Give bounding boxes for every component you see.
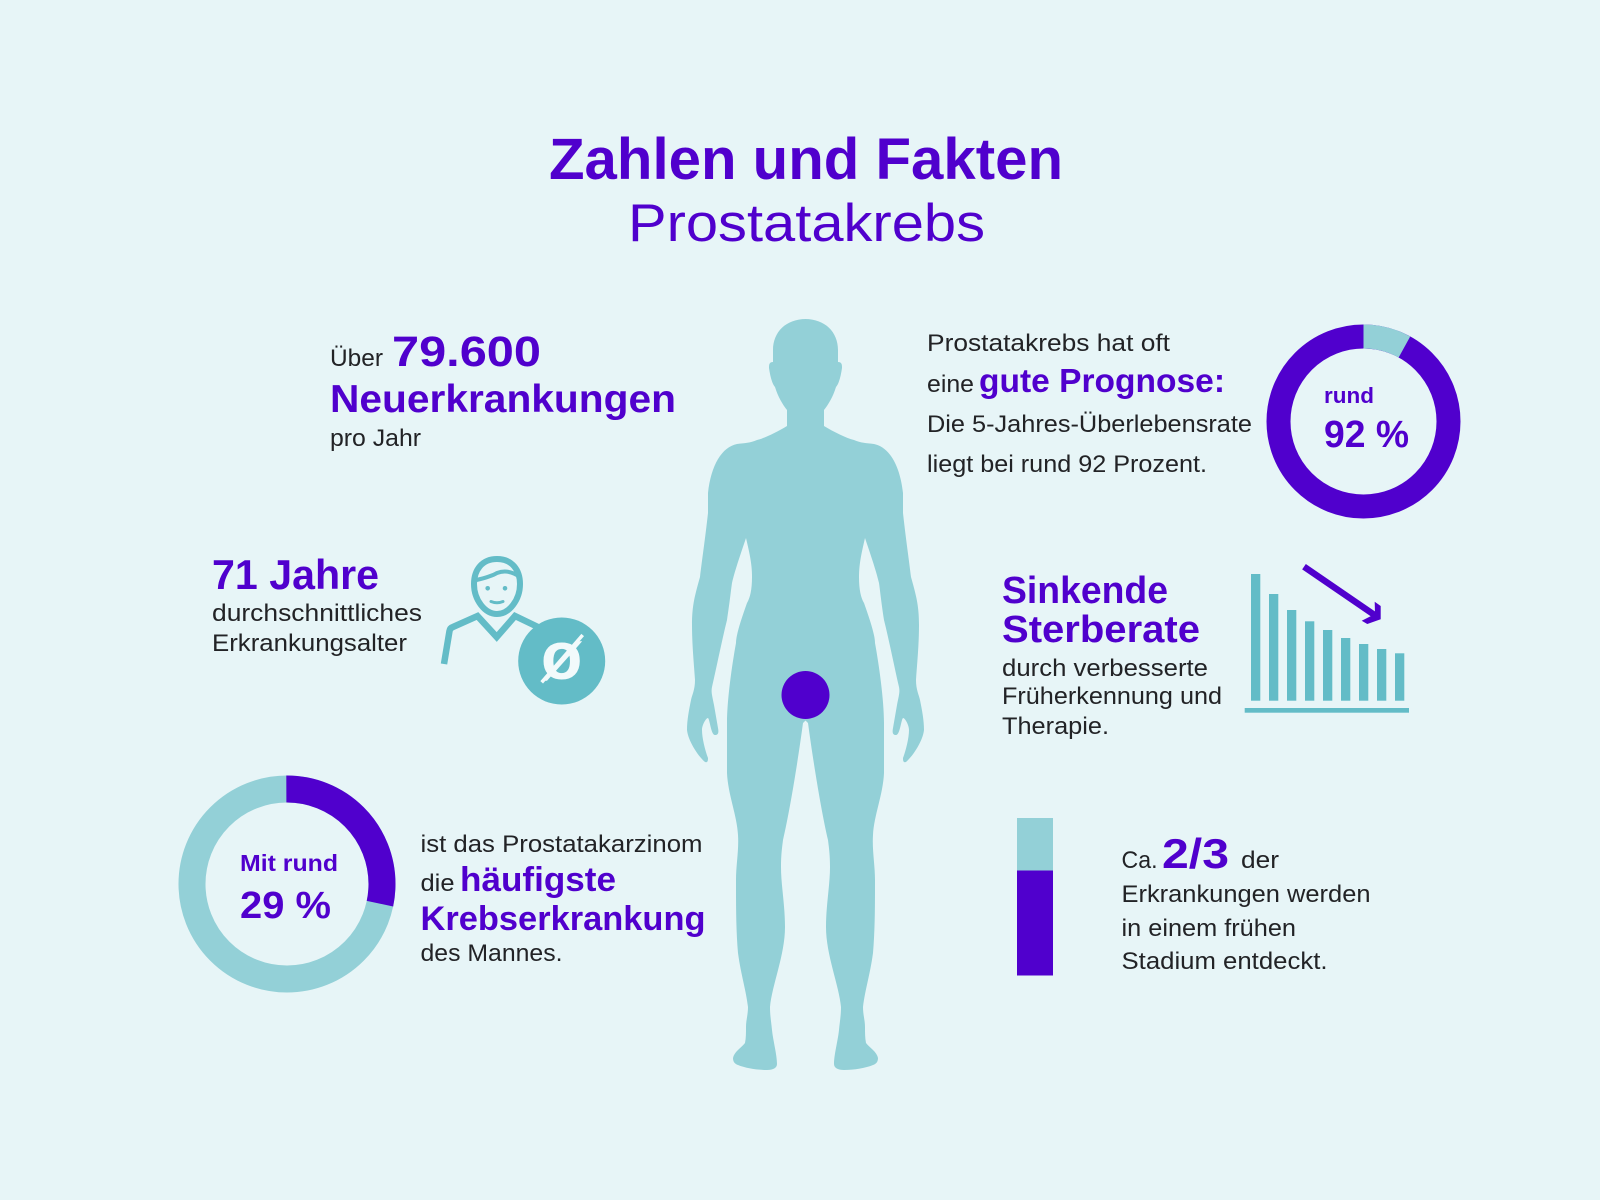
donut chart: 29 percent: 29 % (240, 885, 331, 927)
text block: falling mortality (1002, 570, 1222, 740)
text block: early detection (1122, 830, 1370, 975)
body silhouette (687, 319, 924, 1070)
subtitle: Prostatakrebs (628, 194, 985, 253)
text block: early detection: Stadium entdeckt. (1122, 948, 1328, 975)
text block: early detection: 2/3 (1162, 830, 1229, 877)
right half of body (805, 319, 924, 1070)
text block: average age: durchschnittliches (212, 600, 422, 627)
text block: good prognosis: Die 5-Jahres-Überlebensrate (927, 411, 1252, 438)
text block: early detection: der (1241, 847, 1279, 874)
text block: new cases: Über (330, 345, 383, 372)
text block: average age: 71 Jahre (212, 551, 379, 598)
text block: good prognosis (927, 330, 1252, 478)
man outline (444, 559, 540, 664)
text block: average age: Erkrankungsalter (212, 630, 407, 657)
text block: most common cancer: häufigste (460, 861, 616, 899)
text block: good prognosis: Prostatakrebs hat oft (927, 330, 1170, 357)
text block: early detection: in einem frühen (1122, 915, 1296, 942)
progress bar: two thirds (1017, 818, 1053, 976)
donut chart: 92 percent: rund (1324, 383, 1374, 408)
donut chart: 29 percent (192, 789, 382, 979)
prostate marker (782, 671, 830, 719)
text block: good prognosis: eine (927, 371, 974, 398)
text block: new cases (330, 328, 676, 452)
left half of body (687, 319, 806, 1070)
bar chart: falling mortality (1245, 567, 1409, 713)
text block: falling mortality: Sinkende (1002, 570, 1168, 612)
average badge (518, 618, 605, 704)
arrow (1304, 567, 1381, 624)
text block: most common cancer: des Mannes. (420, 940, 562, 967)
donut chart: 29 percent: Mit rund (240, 850, 338, 876)
donut chart: 92 percent: 92 % (1324, 414, 1409, 456)
text block: good prognosis: liegt bei rund 92 Prozent. (927, 451, 1207, 478)
icon: man with average symbol: ø (541, 618, 583, 694)
text block: good prognosis: gute Prognose: (979, 362, 1225, 399)
text block: new cases: Neuerkrankungen (330, 378, 676, 421)
text block: falling mortality: Früherkennung und (1002, 683, 1222, 710)
text block: most common cancer: Krebserkrankung (420, 900, 706, 938)
text block: falling mortality: durch verbesserte (1002, 655, 1208, 682)
title: Zahlen und Fakten (549, 127, 1063, 192)
donut chart: 92 percent (1278, 336, 1448, 506)
text block: falling mortality: Sterberate (1002, 609, 1200, 651)
text block: falling mortality: Therapie. (1002, 713, 1109, 740)
text block: average age (212, 551, 422, 657)
text block: most common cancer: die (420, 870, 454, 897)
title block (549, 127, 1063, 253)
text block: new cases: 79.600 (392, 328, 541, 376)
text block: early detection: Ca. (1122, 847, 1158, 874)
text block: new cases: pro Jahr (330, 425, 421, 452)
text block: early detection: Erkrankungen werden (1122, 881, 1370, 908)
text block: most common cancer: ist das Prostatakarzinom (420, 831, 702, 858)
text block: most common cancer (420, 831, 706, 967)
icon: man with average symbol (444, 559, 605, 704)
